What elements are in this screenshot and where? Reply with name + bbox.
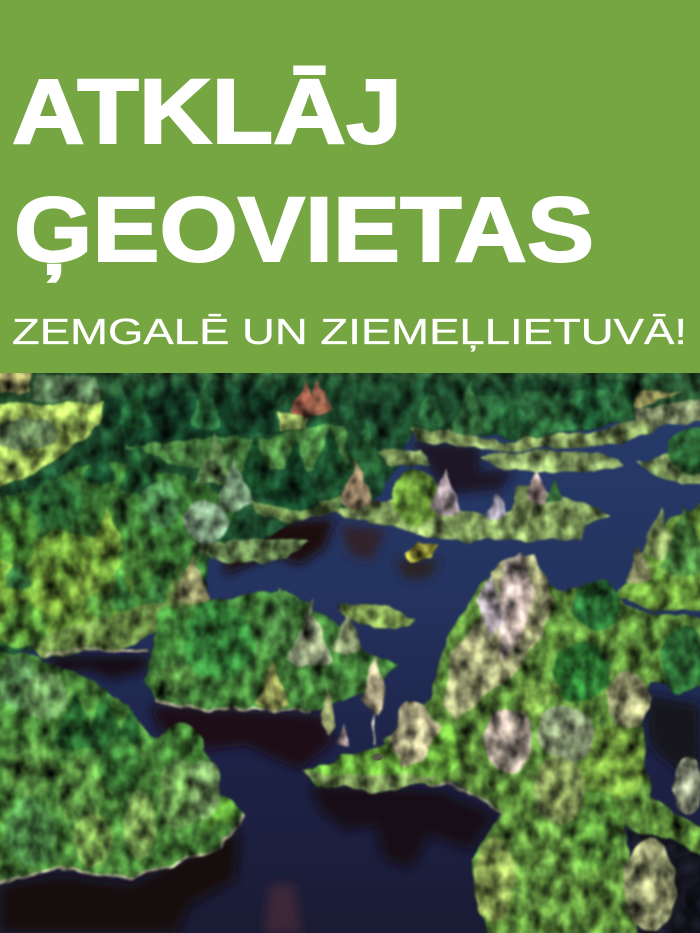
top-right forest lit part bbox=[470, 390, 628, 438]
subtitle: ZEMGALĒ UN ZIEMEĻLIETUVĀ! bbox=[12, 311, 687, 352]
meadow on peninsula bbox=[305, 725, 465, 790]
reeds by central forest bbox=[378, 448, 430, 468]
right upper island bbox=[615, 500, 700, 612]
strip bbox=[250, 495, 345, 522]
conifers: big forest bbox=[0, 377, 384, 649]
tan field top-right bbox=[620, 390, 680, 408]
yellow islet bbox=[403, 542, 438, 561]
reed island bbox=[480, 452, 625, 472]
mid-green forest zone bbox=[0, 460, 235, 650]
title: ĢEOVIETAS: ĢEOVIETAS bbox=[14, 179, 594, 282]
strip bbox=[190, 538, 308, 564]
right-side trees bbox=[475, 504, 700, 931]
right shore forest bbox=[668, 426, 700, 474]
meadow strip bbox=[518, 680, 558, 725]
shore banks bbox=[0, 651, 503, 884]
right shore reed bbox=[636, 455, 700, 486]
brown trail bank bbox=[30, 598, 175, 658]
middle island bbox=[145, 590, 398, 712]
bottom-left peninsula bbox=[0, 650, 245, 884]
pale birch grove bbox=[320, 552, 555, 770]
pale trees on central island bbox=[430, 468, 564, 519]
conifers: top-right forest bbox=[415, 377, 634, 437]
pale trees top-left bbox=[30, 374, 100, 402]
meadow tip bbox=[205, 795, 240, 835]
grove in field bbox=[0, 418, 59, 450]
water reflections bbox=[0, 440, 700, 933]
title: ATKLĀJ: ATKLĀJ bbox=[12, 61, 402, 163]
lower-right dark pond bbox=[628, 832, 700, 933]
reed fringe on peninsula bbox=[303, 772, 440, 793]
water bbox=[0, 373, 700, 933]
big left forest bbox=[0, 380, 640, 652]
wetland top-right bbox=[630, 398, 700, 428]
photo: aerial view of lakes and forested islands bbox=[0, 360, 700, 933]
middle island trees bbox=[153, 586, 362, 710]
small round islet bbox=[337, 602, 414, 628]
right bottom landmass bbox=[385, 555, 700, 933]
dark forest band bbox=[105, 392, 275, 445]
reed strip below top-right forest bbox=[410, 418, 655, 452]
picnic hut bbox=[373, 754, 383, 760]
yellow-green trees left bbox=[0, 530, 135, 645]
tan field top-left bbox=[0, 365, 32, 392]
header panel bbox=[0, 0, 700, 373]
bottom-left conifers bbox=[0, 656, 221, 866]
pale-green forest band bbox=[125, 425, 350, 470]
land and trees bbox=[0, 360, 700, 933]
bright tree on central island bbox=[393, 469, 439, 525]
distant treeline bbox=[0, 360, 700, 408]
central island bbox=[330, 485, 610, 540]
meadow patch top-centre bbox=[278, 412, 310, 431]
green field left bbox=[0, 402, 112, 495]
